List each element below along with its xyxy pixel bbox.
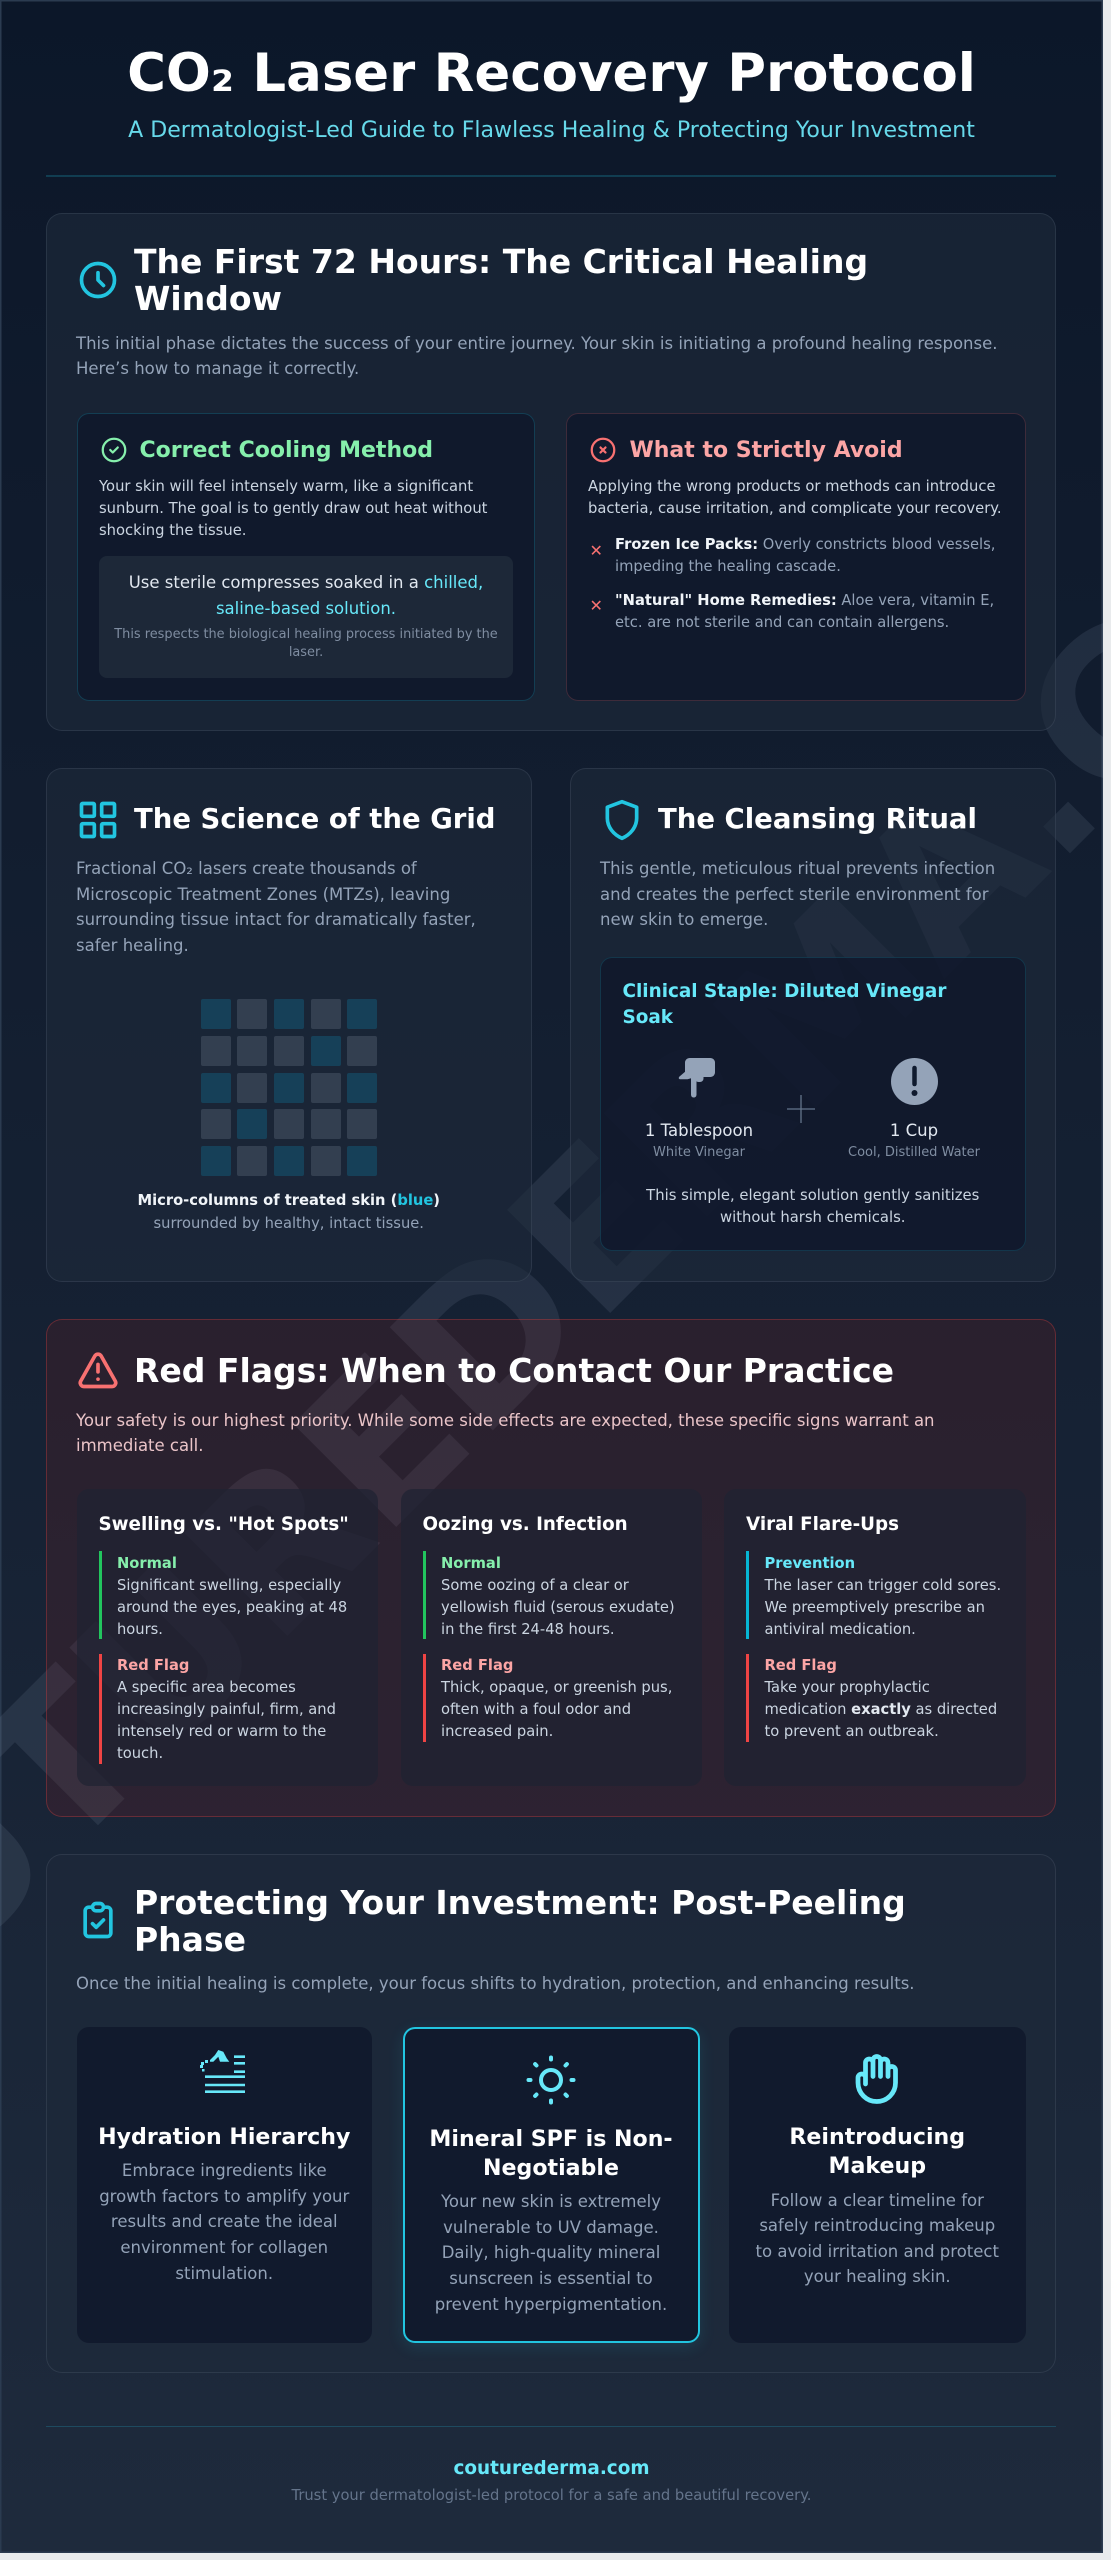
card: oozing vs infection	[400, 1489, 702, 1786]
red flag note: Red Flag	[117, 1657, 189, 1674]
intro text: new skin to emerge.	[600, 910, 768, 929]
card: viral flare-ups	[724, 1489, 1026, 1786]
red flag note	[746, 1654, 1016, 1742]
heading	[134, 1883, 906, 1959]
card: reintroducing makeup	[729, 2027, 1026, 2343]
card text: safely reintroducing makeup	[759, 2216, 995, 2235]
card text: Your new skin is extremely	[441, 2192, 661, 2211]
red flag note: increasingly painful, firm, and	[117, 1701, 336, 1718]
subtitle: A Dermatologist-Led Guide to Flawless Healing & Protecting Your Investment	[128, 118, 975, 143]
card: correct cooling method	[76, 412, 535, 700]
icon: clock	[80, 262, 116, 298]
heading: The First 72 Hours: The Critical Healing	[134, 242, 868, 280]
red flag note: medication exactly as directed	[764, 1701, 997, 1718]
chart: micro-column grid	[201, 999, 377, 1176]
icon: clipboard check	[83, 1902, 113, 1938]
normal note: Normal	[117, 1555, 177, 1572]
chart caption: surrounded by healthy, intact tissue.	[154, 1215, 424, 1232]
heading: Window	[134, 279, 282, 318]
red flag note: intensely red or warm to the	[117, 1723, 326, 1740]
card heading: Swelling vs. "Hot Spots"	[98, 1514, 349, 1535]
recipe heading: Clinical Staple: Diluted Vinegar	[622, 981, 946, 1002]
card text: vulnerable to UV damage.	[443, 2218, 659, 2237]
intro text: safer healing.	[76, 936, 189, 955]
card heading: Makeup	[828, 2152, 926, 2178]
red flag note	[98, 1654, 368, 1764]
icon: x circle	[590, 438, 616, 462]
card: vinegar soak recipe	[600, 956, 1026, 1251]
intro text: Microscopic Treatment Zones (MTZs), leaving	[76, 885, 450, 904]
amount label: 1 Cup	[890, 1121, 938, 1140]
card: swelling vs hot spots	[76, 1489, 378, 1786]
normal note	[422, 1551, 692, 1639]
callout text	[129, 573, 483, 618]
intro text: and creates the perfect sterile environment for	[600, 885, 989, 904]
list item: frozen ice packs	[615, 536, 995, 575]
normal note: in the first 24-48 hours.	[441, 1621, 615, 1638]
red flag note: Thick, opaque, or greenish pus,	[441, 1679, 672, 1696]
recipe heading	[622, 981, 946, 1028]
card text: stimulation.	[175, 2264, 273, 2283]
card text: Embrace ingredients like	[122, 2161, 327, 2180]
red flag note: increased pain.	[441, 1723, 553, 1740]
icon: hand pointing down	[678, 1058, 715, 1098]
body text	[99, 478, 488, 539]
list item: home remedies: "Natural" Home Remedies: Aloe vera, vitamin E,	[615, 592, 994, 608]
normal note: Significant swelling, especially	[117, 1577, 341, 1594]
callout: sterile compresses	[99, 556, 513, 678]
normal note: hours.	[117, 1621, 163, 1638]
intro text: This gentle, meticulous ritual prevents infection	[600, 859, 995, 878]
callout text: Use sterile compresses soaked in a chilled,	[129, 573, 483, 592]
icon: sun	[526, 2056, 576, 2104]
prevention note	[746, 1551, 1016, 1639]
footer: tagline: Trust your dermatologist-led protocol for a safe and beautiful recovery.	[292, 2487, 811, 2504]
card text: growth factors to amplify your	[99, 2187, 349, 2206]
intro text	[76, 334, 998, 378]
icon: plus	[787, 1095, 815, 1123]
title: CO₂ Laser Recovery Protocol	[127, 42, 976, 104]
card text: prevent hyperpigmentation.	[435, 2295, 667, 2314]
normal note	[98, 1551, 368, 1639]
body text: sunburn. The goal is to gently draw out heat without	[99, 500, 487, 517]
recipe heading: Soak	[622, 1007, 673, 1028]
card text: Daily, high-quality mineral	[442, 2243, 660, 2262]
body text: shocking the tissue.	[99, 522, 246, 539]
list item: home remedies	[615, 592, 994, 630]
icon: hydration layers	[200, 2050, 245, 2093]
chart caption	[137, 1192, 440, 1232]
red flag note: Red Flag	[764, 1657, 837, 1674]
recipe note: This simple, elegant solution gently sanitizes	[646, 1187, 979, 1204]
list item: frozen ice packs: impeding the healing cascade.	[615, 558, 841, 575]
red flag note: Red Flag	[441, 1657, 513, 1674]
card text: results and create the ideal	[111, 2212, 338, 2231]
card heading	[429, 2126, 673, 2180]
body text: Applying the wrong products or methods can introduce	[588, 478, 996, 494]
card text	[99, 2161, 350, 2283]
ingredient label: White Vinegar	[653, 1145, 745, 1160]
callout note	[114, 627, 498, 660]
red flag note: A specific area becomes	[117, 1679, 296, 1696]
x mark: ✕	[590, 541, 603, 560]
icon: shield	[606, 800, 638, 840]
recipe note: without harsh chemicals.	[720, 1209, 906, 1226]
card heading	[789, 2124, 965, 2178]
card: hydration hierarchy	[76, 2027, 372, 2343]
panel: cleansing ritual	[570, 768, 1056, 1282]
intro text	[600, 859, 995, 929]
icon: warning triangle	[78, 1352, 118, 1388]
body text: bacteria, cause irritation, and complicate your recovery.	[588, 500, 1002, 517]
icon: hand	[856, 2054, 898, 2104]
intro text	[76, 859, 476, 955]
intro text: Once the initial healing is complete, your focus shifts to hydration, protection, and enhancing results.	[76, 1974, 915, 1993]
red flag note: often with a foul odor and	[441, 1701, 631, 1718]
card heading: Hydration Hierarchy	[98, 2124, 350, 2150]
red flag note	[422, 1654, 692, 1742]
intro text: Fractional CO₂ lasers create thousands of	[76, 859, 417, 878]
intro text: This initial phase dictates the success of your entire journey. Your skin is initiating a profound healing response.	[76, 334, 998, 353]
footer: website: couturederma.com	[453, 2458, 650, 2479]
callout text: saline-based solution.	[216, 599, 396, 618]
body text: Your skin will feel intensely warm, like a significant	[99, 478, 473, 494]
card text: environment for collagen	[120, 2238, 328, 2257]
intro text	[76, 1411, 935, 1455]
card heading: Reintroducing	[789, 2124, 965, 2150]
x mark: ✕	[590, 596, 603, 615]
red flag note: to prevent an outbreak.	[764, 1723, 939, 1740]
amount: tablespoon	[645, 1121, 753, 1160]
amount label: 1 Tablespoon	[645, 1121, 753, 1140]
card heading: Oozing vs. Infection	[422, 1514, 628, 1535]
card text: to avoid irritation and protect	[756, 2242, 999, 2261]
panel: protecting your investment	[46, 1854, 1056, 2373]
callout note: This respects the biological healing process initiated by the	[114, 627, 498, 642]
callout note: laser.	[289, 645, 323, 660]
ingredient label: Cool, Distilled Water	[848, 1145, 980, 1160]
heading: Red Flags: When to Contact Our Practice	[134, 1351, 894, 1390]
heading: The Science of the Grid	[134, 803, 495, 835]
intro text: immediate call.	[76, 1436, 204, 1455]
intro text: Your safety is our highest priority. While some side effects are expected, these specific signs warrant an	[76, 1411, 935, 1430]
red flag note: touch.	[117, 1745, 163, 1762]
normal note: yellowish fluid (serous exudate)	[441, 1599, 675, 1616]
chart caption: Micro-columns of treated skin (blue)	[137, 1192, 440, 1209]
amount: cup	[848, 1121, 980, 1160]
panel: red flags	[46, 1319, 1056, 1816]
normal note: around the eyes, peaking at 48	[117, 1599, 347, 1616]
recipe note	[646, 1187, 979, 1226]
heading: Correct Cooling Method	[140, 438, 433, 463]
intro text: Here’s how to manage it correctly.	[76, 359, 359, 378]
normal note: Some oozing of a clear or	[441, 1577, 629, 1594]
body text	[588, 478, 1002, 517]
card heading: Mineral SPF is Non-	[429, 2126, 673, 2152]
card heading: Negotiable	[483, 2154, 619, 2180]
list item: home remedies: etc. are not sterile and can contain allergens.	[615, 614, 949, 630]
prevention note: antiviral medication.	[764, 1621, 916, 1638]
heading: What to Strictly Avoid	[630, 438, 903, 463]
card: what to avoid	[566, 412, 1026, 700]
icon: exclamation circle	[891, 1058, 938, 1105]
prevention note: The laser can trigger cold sores.	[764, 1577, 1001, 1594]
icon: grid	[80, 802, 116, 838]
card text: Follow a clear timeline for	[771, 2191, 984, 2210]
list item: frozen ice packs: Frozen Ice Packs: Overly constricts blood vessels,	[615, 536, 995, 553]
heading: Phase	[134, 1920, 246, 1959]
heading: Protecting Your Investment: Post-Peeling	[134, 1883, 906, 1922]
heading: The Cleansing Ritual	[658, 803, 977, 835]
card: mineral spf	[402, 2027, 700, 2343]
prevention note: Prevention	[764, 1555, 855, 1572]
intro text: surrounding tissue intact for dramatically faster,	[76, 910, 476, 929]
card text: your healing skin.	[804, 2267, 951, 2286]
card text	[756, 2191, 999, 2286]
heading	[134, 242, 868, 318]
card text: sunscreen is essential to	[449, 2269, 653, 2288]
panel: science of the grid	[46, 768, 532, 1282]
card heading: Viral Flare-Ups	[746, 1514, 899, 1535]
panel: the first 72 hours	[46, 213, 1056, 731]
icon: check circle	[102, 438, 126, 462]
prevention note: We preemptively prescribe an	[764, 1599, 985, 1616]
red flag note: Take your prophylactic	[764, 1679, 930, 1696]
card text	[435, 2192, 667, 2314]
normal note: Normal	[441, 1555, 501, 1572]
